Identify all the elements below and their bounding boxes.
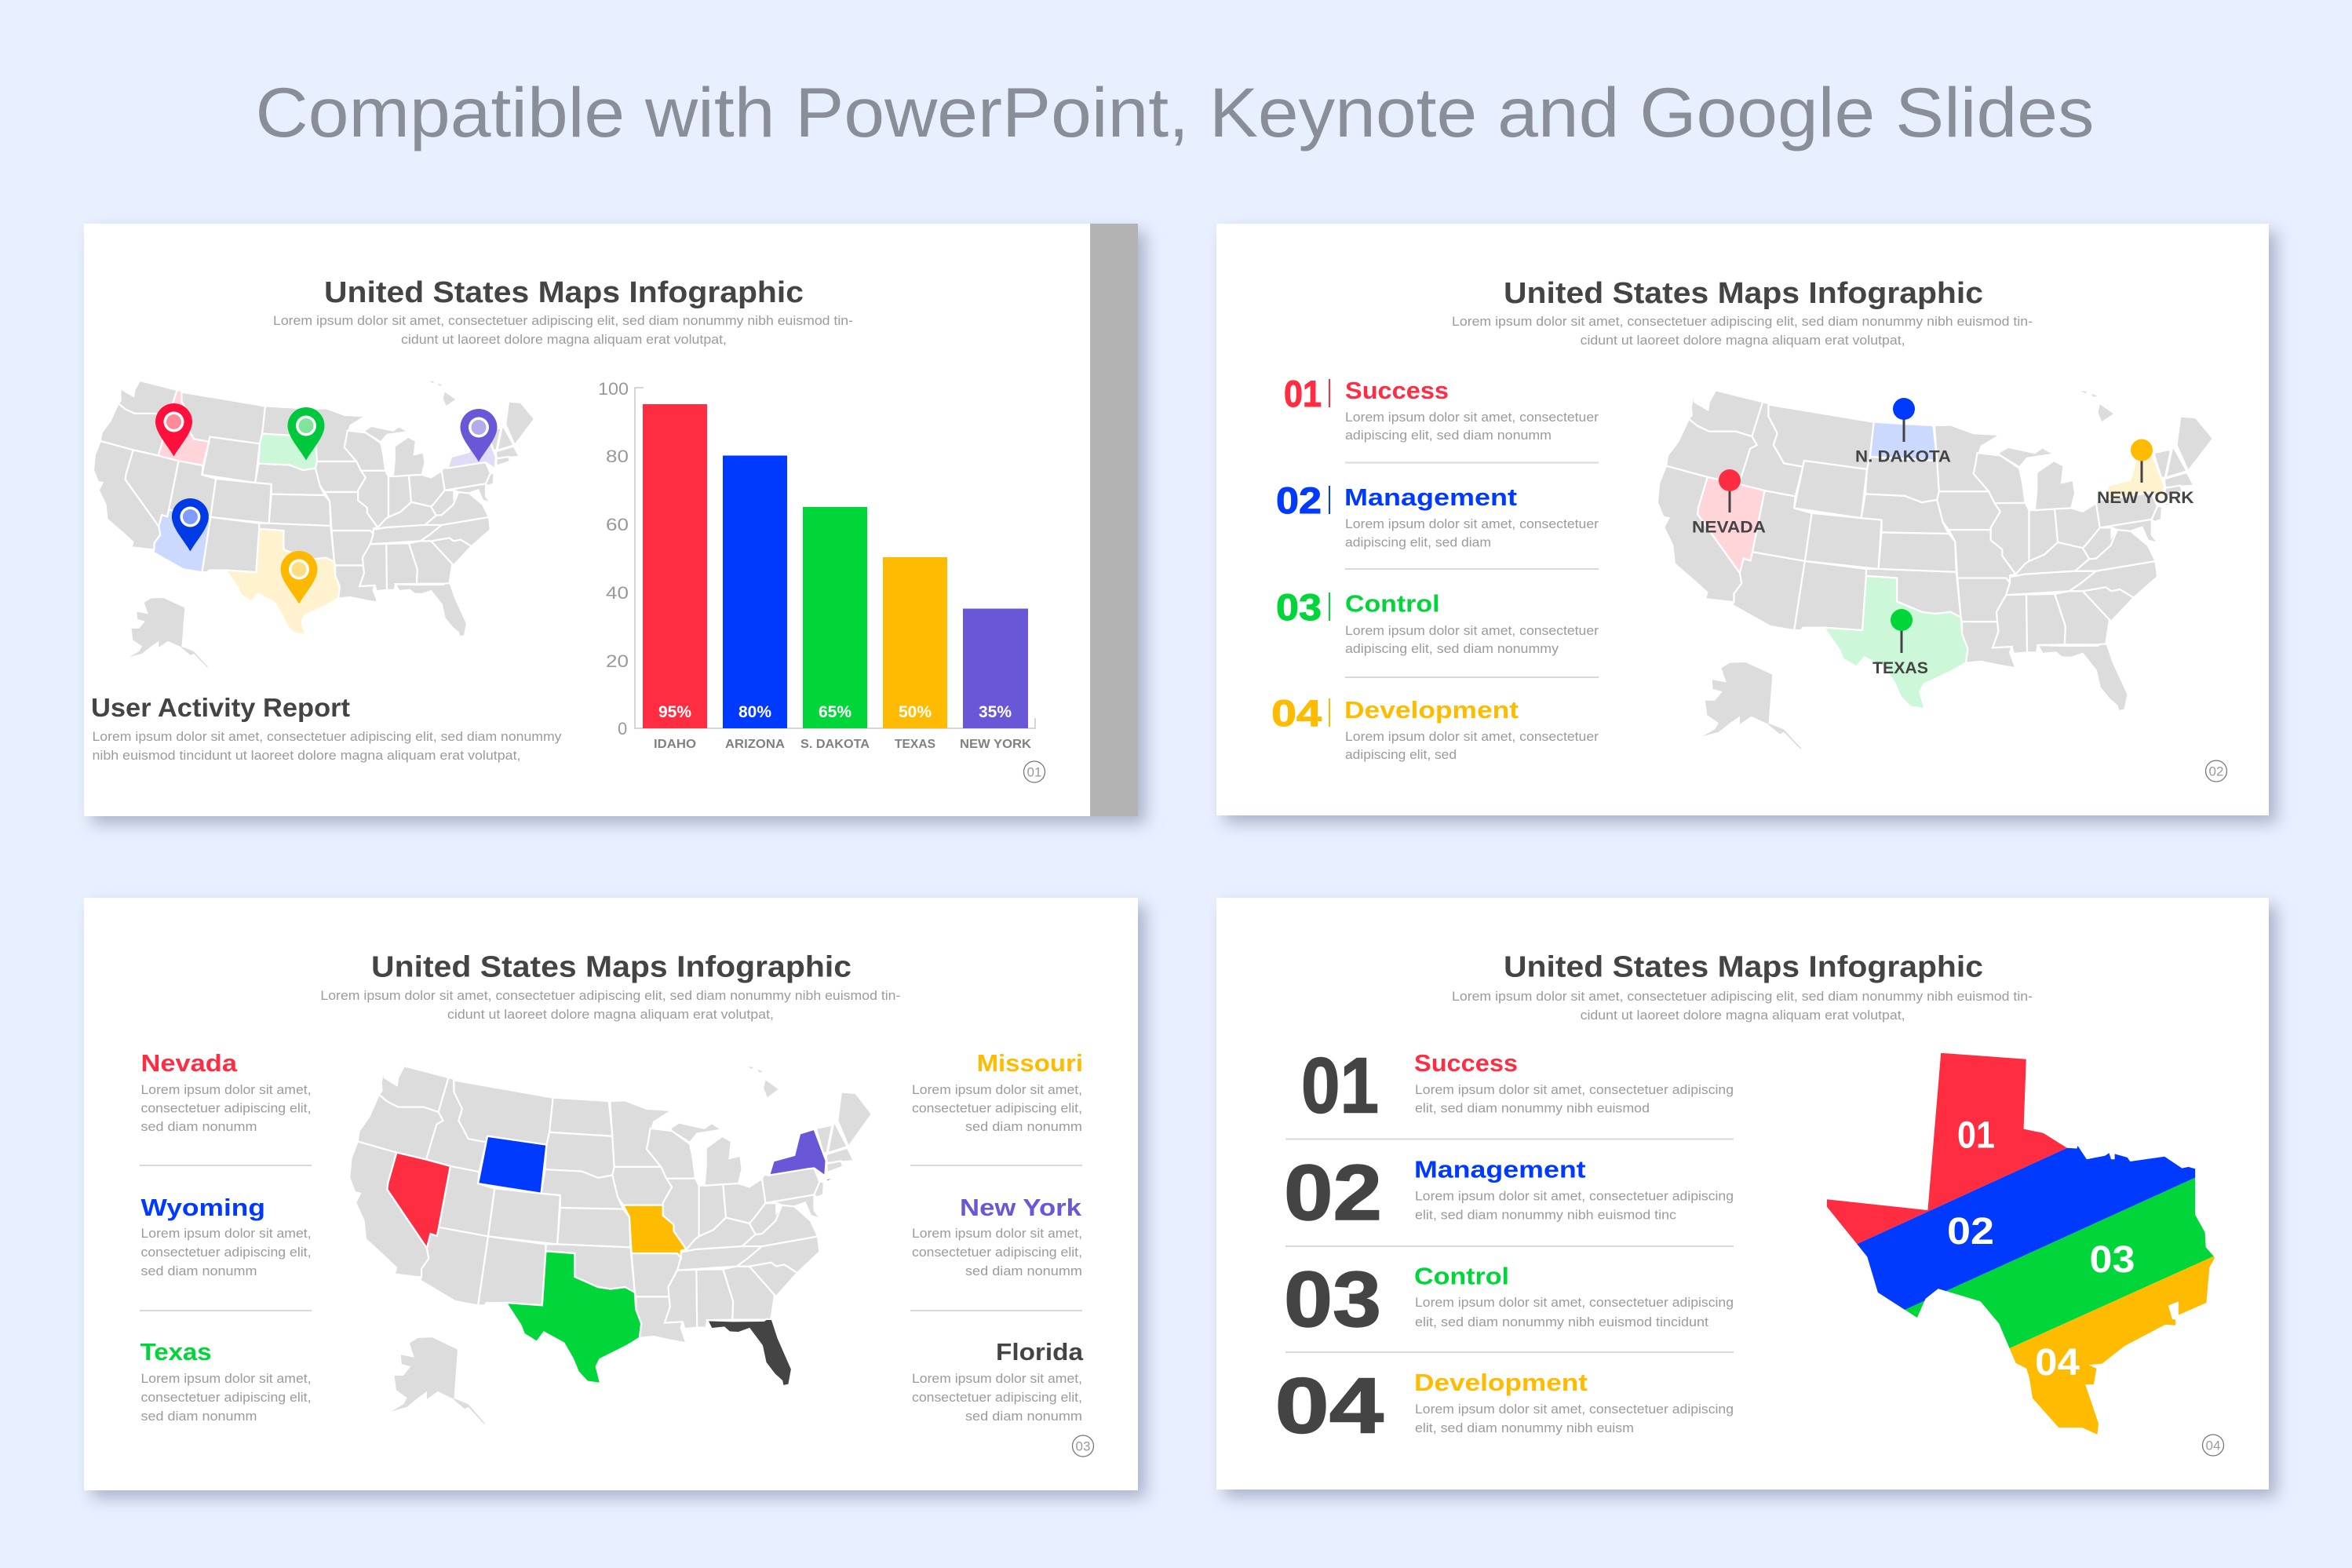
bar Idaho: IDAHO: [654, 738, 696, 751]
item Texas: Texas: [140, 1338, 212, 1366]
page number 01: [1023, 761, 1045, 782]
map: US with highlighted states: [93, 381, 534, 667]
item 01 success: Lorem ipsum dolor sit amet, consectetuer adipiscing: [1415, 1082, 1734, 1097]
map: US with pale highlighted states: [1657, 390, 2213, 749]
item 04 development: adipiscing elit, sed: [1345, 747, 1457, 762]
page number 04: 04: [2206, 1438, 2220, 1453]
item 04 development: 04: [1271, 692, 1322, 734]
bar New York: [960, 609, 1032, 751]
item New York: sed diam nonumm: [965, 1264, 1082, 1278]
page number 02: [2205, 760, 2227, 782]
bar Idaho: 95%: [658, 703, 691, 721]
band label 02: 02: [1947, 1211, 1994, 1253]
pin and label Texas: [1872, 609, 1928, 677]
item Florida: consectetuer adipiscing elit,: [912, 1390, 1082, 1405]
item 02 management: Management: [1414, 1156, 1586, 1183]
item 04 development: Development: [1414, 1369, 1588, 1396]
bar Texas: 50%: [899, 703, 932, 721]
bar Idaho: [643, 404, 707, 751]
item 04 development: elit, sed diam nonummy nibh euism: [1415, 1420, 1634, 1435]
main title: Compatible with PowerPoint, Keynote and Google Slides: [256, 73, 2094, 151]
bar Arizona: [723, 455, 787, 751]
item 01 success: elit, sed diam nonummy nibh euismod: [1415, 1101, 1650, 1116]
y axis labels: [598, 379, 629, 738]
item 01 success: Lorem ipsum dolor sit amet, consectetuer: [1345, 410, 1599, 425]
slide 1 subtitle: Lorem ipsum dolor sit amet, consectetuer adipiscing elit, sed diam nonummy nibh euismod tin-: [273, 313, 853, 328]
item 02 management: [1284, 1149, 1734, 1237]
item 04 development: Lorem ipsum dolor sit amet, consectetuer: [1345, 729, 1599, 744]
item Missouri: sed diam nonumm: [965, 1119, 1082, 1134]
item Texas: Lorem ipsum dolor sit amet,: [141, 1371, 311, 1386]
item Missouri: consectetuer adipiscing elit,: [912, 1101, 1082, 1116]
item 03 control: Lorem ipsum dolor sit amet, consectetuer adipiscing: [1415, 1295, 1734, 1310]
item 03 control: [1276, 586, 1599, 656]
pin and label New York: [2097, 439, 2194, 507]
item New York: New York: [960, 1194, 1082, 1221]
pin and label Nevada: NEVADA: [1692, 518, 1766, 537]
item 03 control: Control: [1414, 1262, 1509, 1290]
bar Texas: TEXAS: [895, 738, 935, 751]
item 02 management: elit, sed diam nonummy nibh euismod tinc: [1415, 1207, 1677, 1222]
panel: slide 4 Texas bands: [1216, 898, 2277, 1497]
y axis labels: 60: [606, 515, 629, 534]
item 04 development: 04: [1274, 1362, 1384, 1450]
item Florida: Lorem ipsum dolor sit amet,: [912, 1371, 1082, 1386]
item Wyoming: [141, 1194, 311, 1278]
icon: blue pin Arizona: [172, 498, 209, 551]
item Florida: [912, 1338, 1084, 1424]
bar South Dakota: S. DAKOTA: [800, 738, 870, 751]
pin and label Texas: TEXAS: [1872, 659, 1928, 677]
slide 2 subtitle: Lorem ipsum dolor sit amet, consectetuer adipiscing elit, sed diam nonummy nibh euismod tin-: [1452, 314, 2033, 329]
item 01 success: 01: [1284, 373, 1322, 414]
item 02 management: 02: [1284, 1149, 1382, 1237]
item Texas: sed diam nonumm: [141, 1409, 257, 1424]
band label 01: 01: [1957, 1114, 1995, 1156]
map: Texas split in four bands: [1827, 1053, 2215, 1435]
item 03 control: elit, sed diam nonummy nibh euismod tincidunt: [1415, 1315, 1708, 1329]
page number 04: [2202, 1435, 2224, 1456]
item 03 control: adipiscing elit, sed diam nonummy: [1345, 641, 1559, 656]
pin and label North Dakota: N. DAKOTA: [1855, 447, 1951, 466]
item Missouri: Lorem ipsum dolor sit amet,: [912, 1082, 1082, 1097]
bar Arizona: ARIZONA: [725, 738, 785, 751]
item Missouri: [912, 1049, 1083, 1134]
item Wyoming: Lorem ipsum dolor sit amet,: [141, 1226, 311, 1241]
panel: slide 3 coloured states: [84, 898, 1146, 1498]
map: US with saturated states: [349, 1066, 872, 1424]
y axis labels: 100: [598, 379, 629, 399]
pin and label North Dakota: [1855, 398, 1951, 466]
item Missouri: Missouri: [977, 1049, 1083, 1077]
page number 03: [1072, 1435, 1094, 1457]
item Florida: Florida: [996, 1338, 1084, 1366]
bar chart: [598, 379, 1035, 751]
band label 03: 03: [2089, 1239, 2135, 1281]
item 03 control: 03: [1276, 586, 1322, 628]
item Wyoming: sed diam nonumm: [141, 1264, 257, 1278]
panel: slide 2 pinned states: [1216, 224, 2277, 823]
item Nevada: sed diam nonumm: [141, 1119, 257, 1134]
bar South Dakota: 65%: [819, 703, 851, 721]
icon: red pin Idaho: [155, 403, 192, 457]
slide 3 subtitle: cidunt ut laoreet dolore magna aliquam erat volutpat,: [447, 1007, 774, 1022]
slide 2 subtitle: cidunt ut laoreet dolore magna aliquam erat volutpat,: [1581, 333, 1905, 348]
item New York: consectetuer adipiscing elit,: [912, 1245, 1082, 1260]
item Texas: consectetuer adipiscing elit,: [141, 1390, 311, 1405]
bar South Dakota: [800, 507, 870, 751]
user activity text: Lorem ipsum dolor sit amet, consectetuer adipiscing elit, sed diam nonummy: [93, 729, 562, 744]
bar Texas: [883, 557, 947, 751]
user activity heading: User Activity Report: [91, 693, 350, 722]
item 03 control: 03: [1284, 1256, 1381, 1344]
item Nevada: Lorem ipsum dolor sit amet,: [141, 1082, 311, 1097]
slide 1 subtitle: cidunt ut laoreet dolore magna aliquam erat volutpat,: [401, 332, 727, 347]
slide 3 subtitle: Lorem ipsum dolor sit amet, consectetuer adipiscing elit, sed diam nonummy nibh euismod tin-: [320, 988, 900, 1003]
item Texas: [140, 1338, 311, 1424]
item 01 success: Success: [1414, 1049, 1518, 1077]
item 02 management: 02: [1276, 480, 1322, 521]
item New York: [912, 1194, 1082, 1278]
item 01 success: 01: [1301, 1042, 1379, 1130]
pin and label Nevada: [1692, 469, 1766, 537]
item Nevada: Nevada: [141, 1049, 238, 1077]
bar New York: 35%: [979, 703, 1012, 721]
page number 03: 03: [1076, 1439, 1090, 1453]
y axis labels: 80: [606, 447, 629, 466]
slide 3 heading: United States Maps Infographic: [371, 951, 851, 984]
item 01 success: adipiscing elit, sed diam nonumm: [1345, 428, 1552, 443]
icon: purple pin New York: [460, 409, 498, 461]
page number 01: 01: [1027, 764, 1041, 780]
band label 04: 04: [2035, 1342, 2080, 1384]
panel: slide 1 user activity: [84, 224, 1146, 824]
bar New York: NEW YORK: [960, 738, 1032, 751]
y axis labels: 20: [606, 651, 629, 671]
y axis labels: 0: [618, 719, 627, 738]
item 02 management: adipiscing elit, sed diam: [1345, 535, 1491, 549]
item 04 development: Development: [1344, 696, 1519, 724]
item Nevada: consectetuer adipiscing elit,: [141, 1101, 311, 1116]
item 04 development: Lorem ipsum dolor sit amet, consectetuer adipiscing: [1415, 1402, 1734, 1417]
item 04 development: [1274, 1362, 1734, 1450]
item 01 success: [1301, 1042, 1734, 1130]
item Wyoming: Wyoming: [141, 1194, 265, 1221]
item 03 control: Control: [1345, 590, 1439, 617]
item 02 management: Lorem ipsum dolor sit amet, consectetuer adipiscing: [1415, 1189, 1734, 1204]
item 02 management: [1276, 480, 1599, 549]
pin and label New York: NEW YORK: [2097, 489, 2194, 507]
item 03 control: Lorem ipsum dolor sit amet, consectetuer: [1345, 623, 1599, 638]
user activity text: nibh euismod tincidunt ut laoreet dolore magna aliquam erat volutpat,: [93, 748, 521, 763]
page number 02: 02: [2209, 764, 2223, 779]
item 01 success: Success: [1345, 377, 1449, 404]
item 02 management: Management: [1344, 483, 1517, 511]
item 04 development: [1271, 692, 1599, 762]
item 03 control: [1284, 1256, 1734, 1344]
slide 2 heading: United States Maps Infographic: [1504, 277, 1983, 310]
item Nevada: [141, 1049, 311, 1134]
icon: yellow pin Texas: [281, 551, 317, 604]
y axis labels: 40: [606, 583, 629, 603]
slide 1 heading: United States Maps Infographic: [324, 276, 804, 309]
icon: green pin South Dakota: [287, 407, 325, 460]
slide 4 subtitle: Lorem ipsum dolor sit amet, consectetuer adipiscing elit, sed diam nonummy nibh euismod tin-: [1452, 989, 2033, 1004]
item 01 success: [1284, 373, 1599, 443]
item 02 management: Lorem ipsum dolor sit amet, consectetuer: [1345, 516, 1599, 531]
slide 4 heading: United States Maps Infographic: [1504, 951, 1983, 984]
bar Arizona: 80%: [738, 703, 771, 721]
item New York: Lorem ipsum dolor sit amet,: [912, 1226, 1082, 1241]
slide 4 subtitle: cidunt ut laoreet dolore magna aliquam erat volutpat,: [1581, 1008, 1905, 1023]
item Wyoming: consectetuer adipiscing elit,: [141, 1245, 311, 1260]
item Florida: sed diam nonumm: [965, 1409, 1082, 1424]
